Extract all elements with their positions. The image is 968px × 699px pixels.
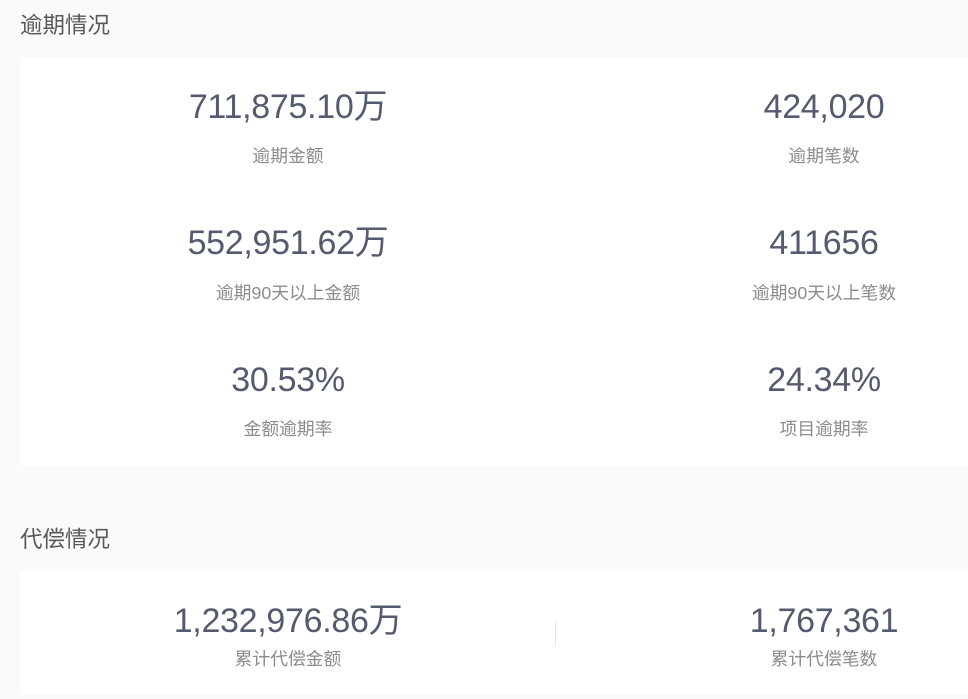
stat: amount overdue rate: 金额逾期率 [244, 419, 332, 439]
stat: overdue count [764, 88, 884, 166]
heading: compensation: 代偿情况 [20, 527, 110, 552]
stat: overdue amount: 711,875.10万 [189, 88, 387, 126]
stat: cumulative compensation count: 1,767,361 [750, 602, 898, 640]
stat: overdue 90+ days amount: 逾期90天以上金额 [216, 283, 360, 303]
stat: overdue count: 逾期笔数 [788, 146, 860, 166]
stat: overdue 90+ days amount: 552,951.62万 [188, 224, 388, 262]
stat: overdue 90+ days count [752, 224, 896, 303]
stat: overdue amount: 逾期金额 [252, 146, 324, 166]
stat: overdue 90+ days count: 411656 [769, 224, 879, 262]
stat: project overdue rate [767, 361, 881, 439]
stat: project overdue rate: 项目逾期率 [780, 419, 868, 439]
stat: cumulative compensation amount: 累计代偿金额 [235, 649, 341, 669]
stat: overdue 90+ days count: 逾期90天以上笔数 [752, 283, 896, 303]
stat: cumulative compensation count [750, 602, 898, 669]
stat: cumulative compensation amount [174, 602, 402, 669]
stat: project overdue rate: 24.34% [767, 361, 881, 399]
stat: overdue count: 424,020 [764, 88, 884, 126]
stat: overdue 90+ days amount [188, 224, 388, 303]
heading: overdue: 逾期情况 [20, 13, 110, 38]
panel: compensation [20, 571, 968, 695]
divider [555, 621, 556, 646]
stat: cumulative compensation amount: 1,232,976.86万 [174, 602, 402, 640]
stat: amount overdue rate: 30.53% [231, 361, 345, 399]
stat: cumulative compensation count: 累计代偿笔数 [771, 649, 877, 669]
panel: overdue [20, 57, 968, 465]
stat: overdue amount [189, 88, 387, 166]
stat: amount overdue rate [231, 361, 345, 439]
